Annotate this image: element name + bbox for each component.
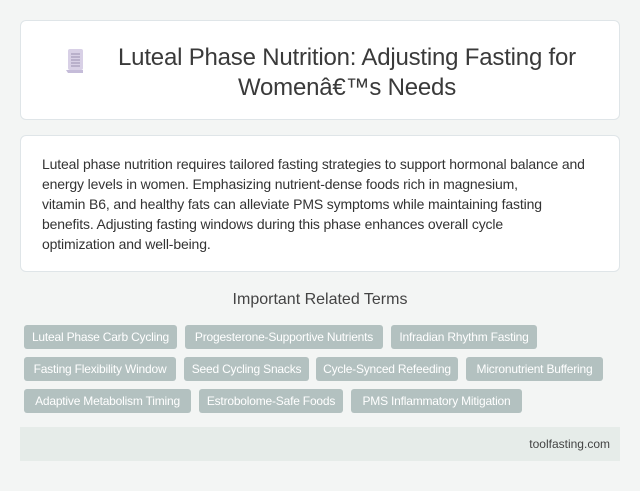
description card [20, 135, 620, 272]
tags: Fasting Flexibility Window [34, 362, 166, 376]
tags: Adaptive Metabolism Timing [35, 394, 180, 408]
title: Luteal Phase Nutrition: Adjusting Fasting for Womenâ€™s Needs [118, 44, 576, 101]
description text: vitamin B6, and healthy fats can alleviate PMS symptoms while maintaining fasting [42, 196, 542, 212]
description text: benefits. Adjusting fasting windows during this phase enhances overall cycle [42, 216, 503, 232]
tags: Infradian Rhythm Fasting [399, 330, 529, 344]
title card [20, 20, 620, 120]
tags: Luteal Phase Carb Cycling [32, 330, 169, 344]
description text: Luteal phase nutrition requires tailored fasting strategies to support hormonal balance and [42, 156, 585, 172]
tags: Progesterone-Supportive Nutrients [195, 330, 373, 344]
tags: Micronutrient Buffering [477, 362, 592, 376]
tags: Estrobolome-Safe Foods [207, 394, 335, 408]
description text: optimization and well-being. [42, 236, 211, 252]
tags: PMS Inflammatory Mitigation [362, 394, 510, 408]
description text: energy levels in women. Emphasizing nutrient-dense foods rich in magnesium, [42, 176, 518, 192]
description text [42, 156, 585, 252]
icon: scroll [66, 49, 83, 73]
footer [20, 427, 620, 461]
footer source: toolfasting.com [529, 437, 610, 451]
tags: Cycle-Synced Refeeding [323, 362, 451, 376]
heading: related terms: Important Related Terms [233, 291, 407, 308]
tags: Seed Cycling Snacks [192, 362, 301, 376]
